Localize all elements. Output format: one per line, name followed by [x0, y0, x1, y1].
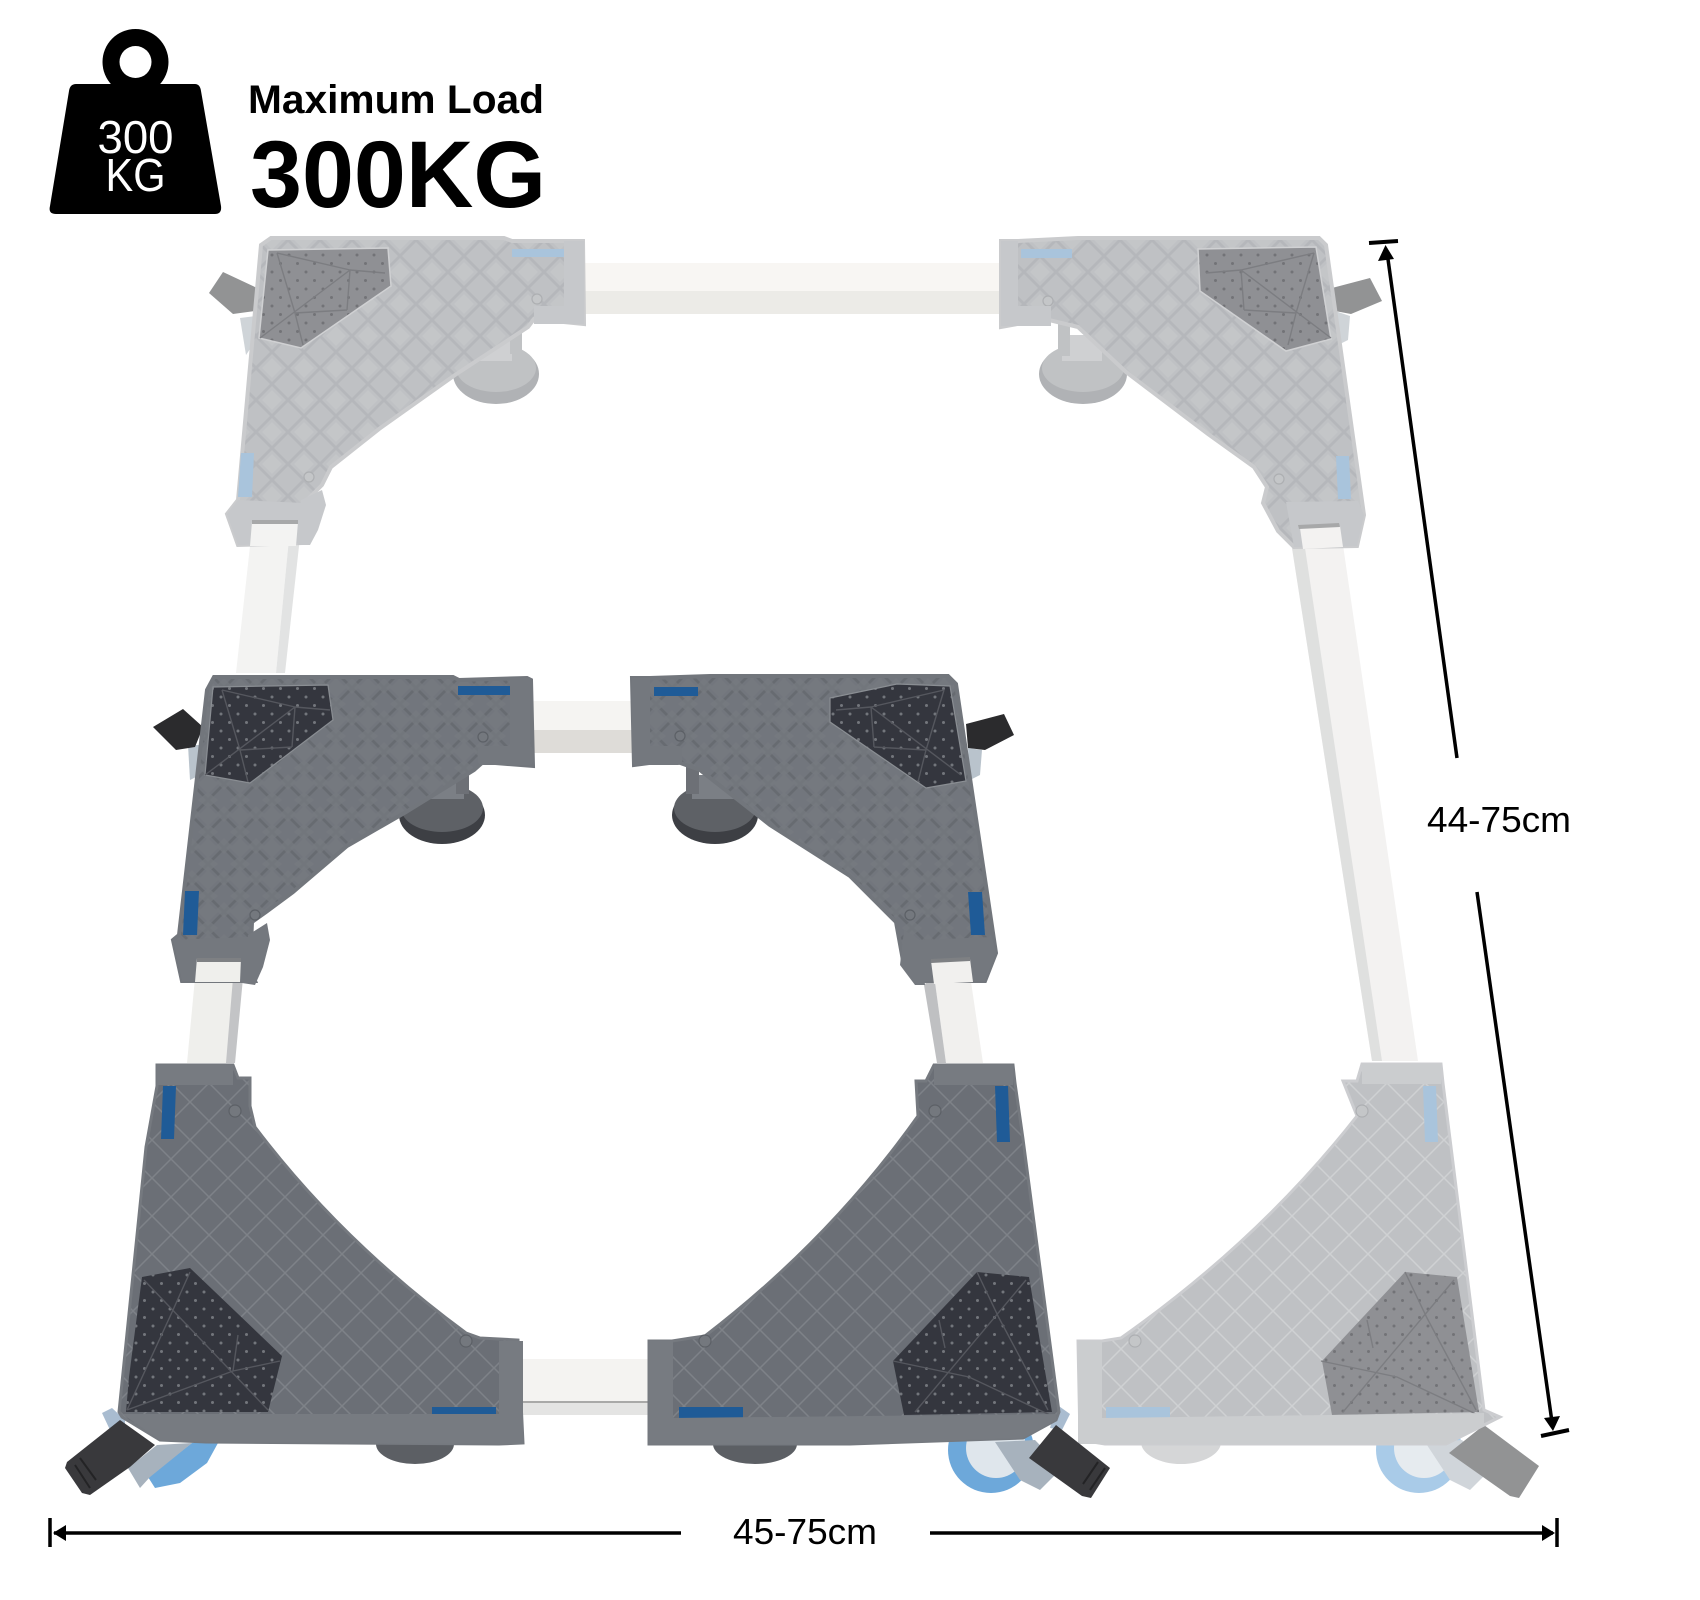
knob: dark bottom-right	[713, 1424, 797, 1464]
weight icon	[50, 29, 221, 214]
corner: light bottom-right	[1078, 1064, 1539, 1498]
dimension label: 44-75cm: 44-75cm	[1427, 799, 1571, 840]
knob: dark top-right	[672, 758, 758, 844]
corner: dark bottom-right	[649, 1065, 1110, 1498]
corner: light top-left	[209, 238, 584, 546]
caster: dark bottom-left	[102, 1408, 218, 1488]
lever: dark top-left	[153, 709, 203, 780]
bar mouth: dark top-left	[195, 958, 241, 982]
knob: light top-right	[1039, 322, 1127, 404]
corner: light top-right	[1001, 238, 1382, 549]
plate: dark bottom-right	[649, 1065, 1059, 1444]
knob: light bottom-right	[1141, 1420, 1221, 1464]
bar: small frame left	[187, 978, 243, 1063]
caps: dark top-right	[632, 678, 996, 985]
screws: dark top-left	[250, 732, 488, 920]
screws: dark bottom-right	[699, 1105, 941, 1347]
level vials: light top-left	[238, 249, 564, 497]
heading: 300KG: 300KG	[250, 122, 546, 228]
plate: light bottom-right	[1078, 1064, 1500, 1444]
bar: small frame top	[528, 701, 633, 753]
bar mouth: light top-left	[250, 520, 298, 546]
bar: small frame bottom	[523, 1359, 649, 1415]
caps: dark bottom-left	[122, 1065, 523, 1444]
plate: light top-left	[227, 238, 584, 545]
pad: light bottom-right	[1321, 1272, 1479, 1415]
pad: dark top-right	[830, 684, 966, 788]
dimension arrow: width right	[930, 1518, 1557, 1547]
level vials: dark bottom-left	[161, 1086, 496, 1418]
knob: dark top-left	[399, 758, 485, 844]
screws: dark top-right	[675, 731, 915, 920]
corner: dark top-right	[632, 676, 1014, 985]
level vials: dark top-right	[654, 687, 985, 935]
dimension label: 45-75cm: 45-75cm	[733, 1511, 877, 1552]
bar: small frame right	[924, 975, 983, 1063]
caps: light top-right	[1001, 241, 1364, 547]
lever: dark bottom-right	[1029, 1425, 1110, 1498]
bar: large frame left	[236, 528, 301, 673]
level vials: light top-right	[1021, 249, 1351, 499]
dimension arrow: depth upper	[1369, 241, 1457, 758]
corner: dark top-left	[153, 677, 533, 985]
plate: dark top-left	[173, 677, 533, 981]
screws: light top-right	[1043, 296, 1284, 484]
bar: large frame top	[584, 263, 1001, 314]
pad: light top-right	[1198, 247, 1331, 351]
screws: light top-left	[304, 294, 542, 482]
bar mouth: light top-right	[1298, 523, 1343, 549]
heading: Maximum Load: Maximum Load	[248, 78, 544, 122]
lever: light top-right	[1332, 278, 1382, 345]
pad: dark bottom-left	[126, 1268, 282, 1412]
screws: dark bottom-left	[229, 1105, 472, 1347]
dimension arrow: width left	[50, 1518, 681, 1547]
weight icon: 300	[98, 111, 174, 163]
plate: light top-right	[1001, 238, 1364, 547]
caster: light bottom-right	[1376, 1407, 1490, 1493]
caster: dark bottom-right	[948, 1404, 1070, 1493]
knob: light top-left	[453, 320, 539, 404]
caps: light bottom-right	[1078, 1064, 1484, 1444]
lever: dark bottom-left	[65, 1420, 155, 1495]
bar: large frame right	[1292, 545, 1418, 1061]
level vials: dark top-left	[183, 686, 510, 935]
level vials: dark bottom-right	[679, 1086, 1010, 1418]
pad: light top-left	[259, 248, 391, 348]
plate: dark top-right	[632, 676, 996, 981]
lever: light top-left	[209, 272, 257, 355]
dimension arrow: depth lower	[1477, 892, 1569, 1436]
caps: dark top-left	[173, 678, 533, 985]
level vials: light bottom-right	[1106, 1086, 1438, 1418]
pad: dark bottom-right	[893, 1272, 1052, 1415]
pad: dark top-left	[205, 685, 333, 783]
knob: dark bottom-left	[376, 1424, 454, 1464]
screws: light bottom-right	[1129, 1105, 1368, 1347]
plate: dark bottom-left	[119, 1065, 523, 1444]
caps: light top-left	[227, 241, 584, 545]
caps: dark bottom-right	[649, 1065, 1056, 1444]
corner: dark bottom-left	[65, 1065, 523, 1495]
bar mouth: dark top-right	[931, 957, 973, 984]
lever: light bottom-right	[1449, 1425, 1539, 1498]
weight icon: KG	[106, 149, 166, 201]
lever: dark top-right	[966, 714, 1014, 780]
